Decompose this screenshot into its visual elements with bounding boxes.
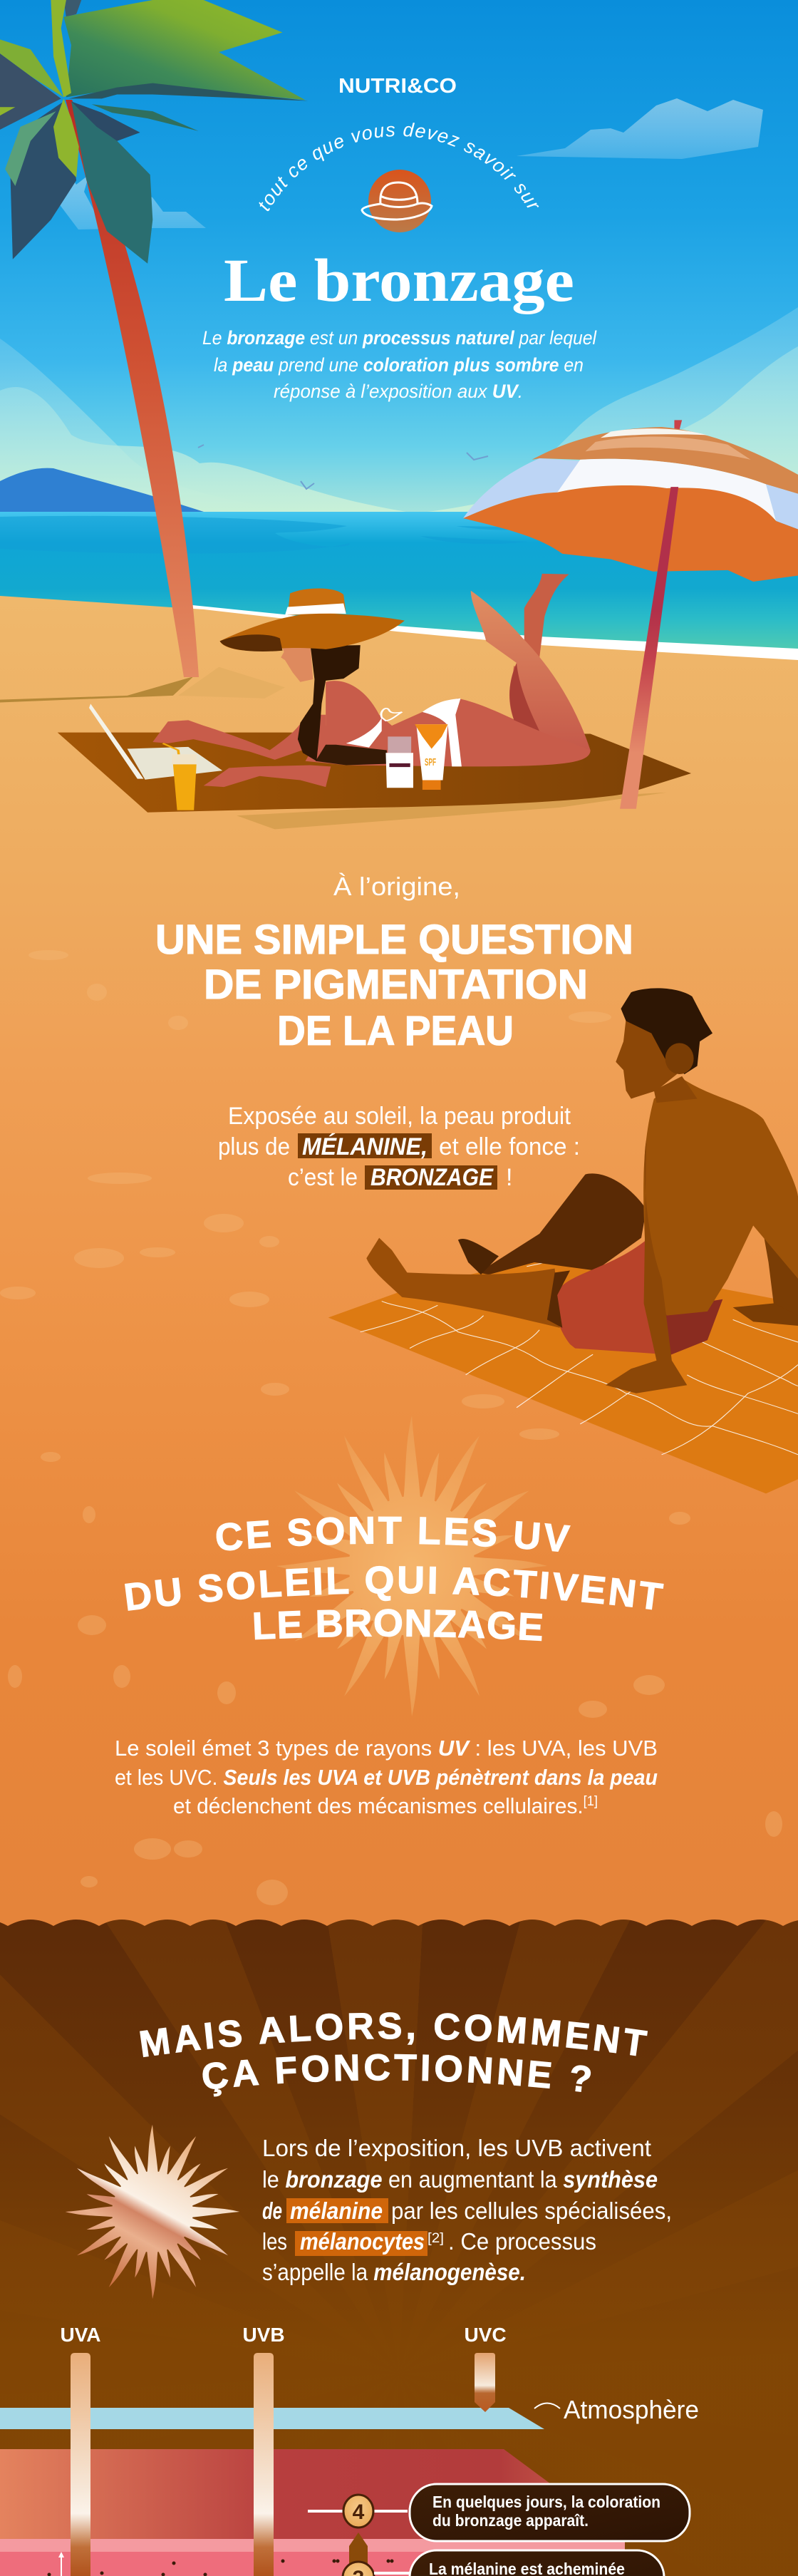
- distant hills right: [428, 307, 798, 512]
- step 4 callout: du bronzage apparaît.: [432, 2511, 589, 2530]
- text: melanogenesis: [262, 2135, 672, 2285]
- melanin dots: [47, 2559, 393, 2576]
- birds: [198, 445, 488, 489]
- text: melanogenesis: mélanine: [290, 2198, 383, 2224]
- text: UV types: et les UVC. Seuls les UVA et UVB pénètrent dans la peau: [115, 1765, 658, 1790]
- drink: [163, 743, 197, 810]
- icon: hat badge: [362, 170, 432, 232]
- epidermis layer: [0, 2552, 625, 2576]
- text: UV types: [1]: [584, 1794, 598, 1809]
- UV labels: UVB: [242, 2324, 285, 2346]
- scene: man on towel: [328, 988, 798, 1493]
- palm fronds: [0, 0, 308, 264]
- sand with scalloped bottom edge: [0, 596, 798, 1926]
- palm trunk: [66, 100, 199, 677]
- UVC ray: [475, 2353, 495, 2412]
- arrow between steps: [349, 2533, 368, 2566]
- heading: UV: DU SOLEIL QUI ACTIVENT: [125, 1565, 664, 1611]
- step 4 callout: En quelques jours, la coloration: [432, 2493, 660, 2511]
- atmosphere label: Atmosphère: [564, 2395, 699, 2424]
- heading: origin: [155, 872, 633, 1054]
- hair: [298, 645, 361, 761]
- heading: UV: LE BRONZAGE: [254, 1609, 543, 1641]
- step 3 connector: [374, 2572, 410, 2575]
- distant hills left: [0, 339, 406, 512]
- intro text: réponse à l’exposition aux UV.: [274, 381, 523, 402]
- cloud: top right: [517, 98, 763, 159]
- sky background: [0, 0, 798, 513]
- text: melanogenesis: de: [262, 2198, 282, 2224]
- heading: origin: UNE SIMPLE QUESTION: [155, 917, 633, 963]
- text: melanin explanation: et elle fonce :: [439, 1133, 580, 1160]
- text: UV types: Le soleil émet 3 types de rayons UV : les UVA, les UVB: [115, 1736, 658, 1761]
- dark section background with rays: [0, 1917, 798, 2576]
- intro text: la peau prend une coloration plus sombre en: [214, 354, 584, 376]
- curved subtitle: tout ce que vous devez savoir sur: [259, 123, 539, 211]
- step 4 badge: [343, 2495, 373, 2528]
- palm tree shadow on sand: [0, 667, 285, 702]
- text: UV types: et déclenchent des mécanismes cellulaires.: [173, 1793, 599, 1818]
- heading: origin: DE LA PEAU: [277, 1008, 514, 1054]
- step 4 connector: [308, 2510, 408, 2513]
- scene: woman on the beach: [58, 574, 691, 829]
- text: melanin explanation: !: [506, 1164, 512, 1191]
- step 3 badge: [343, 2562, 374, 2576]
- stratum corneum layer: [0, 2539, 625, 2552]
- brand logo: NUTRI&CO: [338, 75, 457, 98]
- text: melanin explanation: Exposée au soleil, la peau produit: [228, 1103, 571, 1130]
- heading: UV: [125, 1517, 664, 1641]
- text: melanogenesis: . Ce processus: [448, 2228, 596, 2255]
- atmosphere band: [0, 2408, 544, 2429]
- sunscreen tube: [415, 724, 448, 790]
- UVA ray: [71, 2353, 90, 2576]
- text: UV types: [115, 1736, 658, 1818]
- skin diagram: [0, 2449, 625, 2576]
- towel: [328, 1254, 798, 1493]
- text: melanin explanation: c’est le: [288, 1164, 358, 1191]
- umbrella: [463, 420, 798, 809]
- text: melanogenesis: les: [262, 2228, 287, 2255]
- towel shadow: [237, 793, 667, 829]
- heading: UV: CE SONT LES UV: [217, 1517, 571, 1552]
- mountain: [0, 468, 204, 512]
- step 4 badge: 4: [353, 2500, 365, 2524]
- text: melanogenesis: [2]: [428, 2231, 444, 2246]
- supplement bottle: [385, 736, 413, 788]
- sun watermark: [271, 1409, 553, 1723]
- text: melanogenesis: par les cellules spécialisées,: [391, 2198, 672, 2224]
- tube label: SPF: [425, 756, 436, 768]
- text: melanin explanation: BRONZAGE: [370, 1164, 494, 1191]
- intro text: Le bronzage est un processus naturel par lequel: [202, 327, 597, 349]
- towel: [58, 733, 691, 813]
- dermis layer: [0, 2449, 625, 2576]
- heading: how it works: [140, 2012, 648, 2097]
- heading: origin: DE PIGMENTATION: [204, 962, 588, 1008]
- woman hat: [220, 588, 405, 651]
- white depth arrow: [58, 2552, 64, 2576]
- icon: sun: [61, 2121, 244, 2303]
- step 4 callout: [410, 2484, 690, 2541]
- man figure: [366, 988, 798, 1393]
- text: melanin explanation: [218, 1103, 580, 1191]
- text: melanin explanation: MÉLANINE,: [302, 1133, 428, 1160]
- UV labels: [60, 2324, 507, 2346]
- text: melanogenesis: mélanocytes: [300, 2228, 425, 2255]
- sand blotches: [0, 950, 782, 1905]
- laptop: [89, 704, 222, 780]
- UVB ray: [254, 2353, 274, 2576]
- step 3 callout: [410, 2550, 664, 2576]
- woman body: [152, 574, 591, 787]
- text: melanogenesis: Lors de l’exposition, les UVB activent: [262, 2135, 651, 2161]
- text: melanin explanation: plus de: [218, 1133, 290, 1160]
- heading: how it works: MAIS ALORS, COMMENT: [140, 2012, 648, 2057]
- intro text: [202, 327, 597, 402]
- UV labels: UVC: [464, 2324, 507, 2346]
- UV labels: UVA: [60, 2324, 101, 2346]
- title: Le bronzage: [224, 246, 574, 314]
- heading: how it works: ÇA FONCTIONNE ?: [202, 2054, 591, 2097]
- text: melanogenesis: s’appelle la mélanogenèse.: [262, 2259, 526, 2285]
- foam: [185, 604, 798, 670]
- sea wave shadows: [0, 516, 542, 554]
- sea: [0, 512, 798, 665]
- cloud: behind palm: [43, 169, 206, 230]
- heading: origin: À l’origine,: [333, 872, 460, 901]
- text: melanogenesis: le bronzage en augmentant la synthèse: [262, 2166, 658, 2193]
